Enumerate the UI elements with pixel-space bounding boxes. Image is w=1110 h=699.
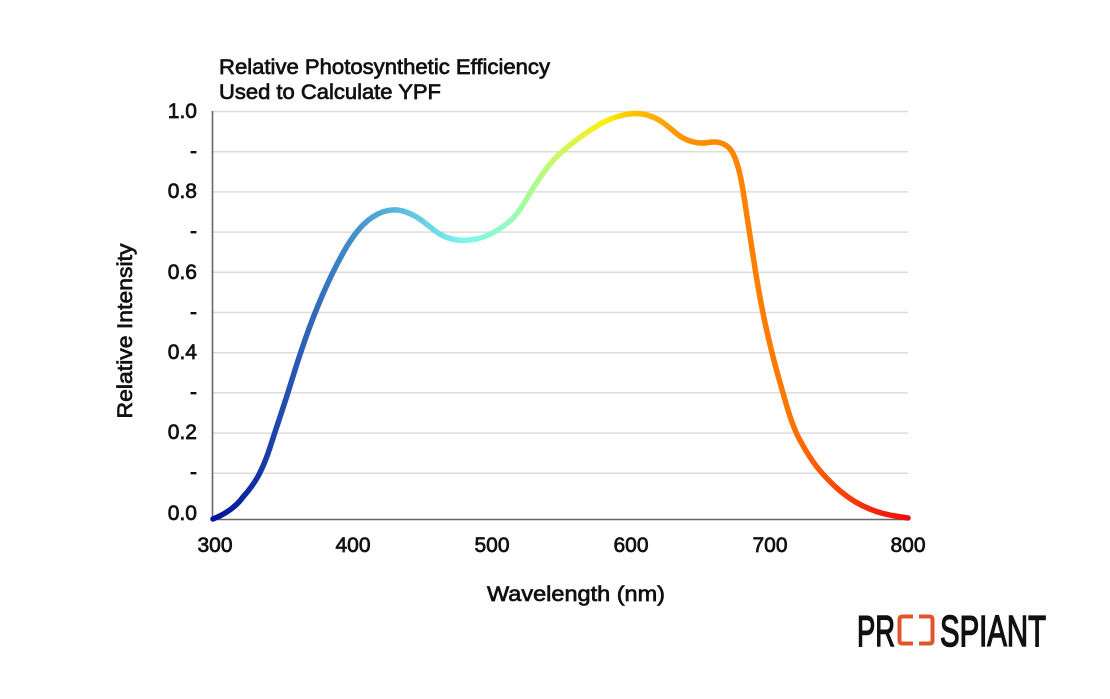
- y axis tick labels: -: [190, 301, 197, 324]
- chart title: Used to Calculate YPF: [219, 81, 441, 104]
- x axis tick labels: 500: [474, 534, 510, 557]
- x axis tick labels: [197, 534, 926, 557]
- icon: orange brackets: [900, 616, 932, 644]
- axes: [212, 111, 908, 520]
- spectrum curve: [213, 114, 908, 519]
- chart title: [219, 56, 551, 104]
- logo: Prospiant: SPIANT: [940, 607, 1046, 656]
- x axis title: Wavelength (nm): [487, 583, 665, 606]
- line chart: [114, 100, 926, 606]
- grid lines: [213, 112, 908, 473]
- y axis tick labels: [168, 100, 197, 525]
- y axis title: Relative Intensity: [114, 243, 137, 418]
- y axis tick labels: 0.6: [168, 261, 197, 284]
- y axis tick labels: 1.0: [168, 100, 197, 123]
- x axis tick labels: 800: [890, 534, 926, 557]
- logo: Prospiant: PR: [857, 607, 895, 656]
- y axis tick labels: -: [190, 220, 197, 243]
- x axis tick labels: 600: [613, 534, 649, 557]
- y axis tick labels: 0.8: [168, 180, 197, 203]
- y axis tick labels: -: [190, 461, 197, 484]
- x axis tick labels: 300: [197, 534, 233, 557]
- y axis tick labels: -: [190, 381, 197, 404]
- chart title: Relative Photosynthetic Efficiency: [219, 56, 551, 79]
- x axis tick labels: 700: [752, 534, 788, 557]
- logo: Prospiant: [857, 607, 1046, 656]
- x axis tick labels: 400: [335, 534, 371, 557]
- y axis tick labels: -: [190, 140, 197, 163]
- y axis tick labels: 0.0: [168, 502, 197, 525]
- y axis tick labels: 0.2: [168, 421, 197, 444]
- y axis tick labels: 0.4: [168, 341, 197, 364]
